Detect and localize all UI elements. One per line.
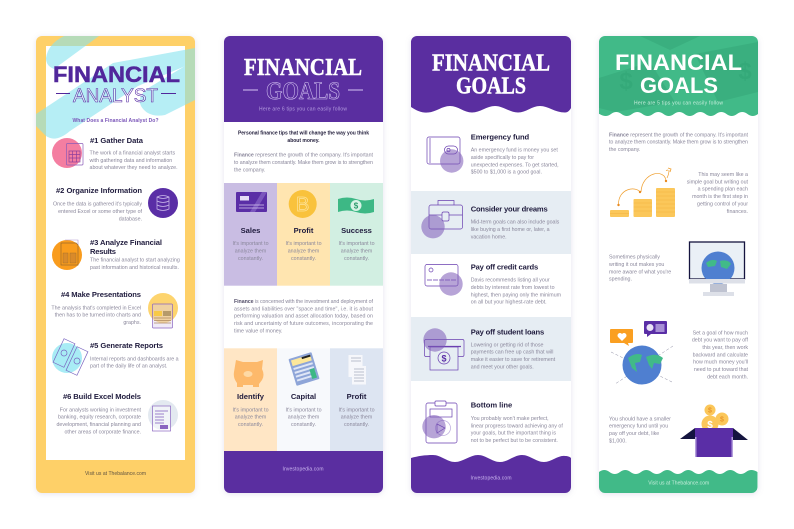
row: emergency fund: [427, 132, 559, 176]
row: emergency fund: $500 to $1,000 is a good goal.: [471, 170, 542, 176]
item 5: generate reports: Internal reports and dashboards are a: [90, 356, 179, 362]
card: sales: analyze them: [235, 249, 267, 255]
item 5: generate reports: part of the daily life of an analyst.: [90, 364, 167, 370]
paragraph: risk and uncertainty of future outcomes, incorporating the: [234, 321, 373, 327]
header: FINANCIAL: [615, 50, 742, 75]
intro text: about money.: [287, 138, 320, 144]
text block: month is the first step in: [692, 194, 748, 200]
row: bottom line: your goals, but the important thing is: [471, 431, 556, 437]
paragraph: [234, 299, 374, 335]
header: $: [738, 58, 752, 85]
item 5: generate reports: #5 Generate Reports: [90, 341, 163, 350]
item 5: generate reports: [52, 339, 179, 375]
icon: box with coins: $: [708, 408, 712, 414]
header: GOALS: [640, 73, 718, 98]
title: FINANCIAL: [53, 62, 180, 87]
item 3: analyze results: [52, 238, 180, 271]
card: success bill: analyze them: [341, 249, 373, 255]
item 2: organize information: database.: [119, 216, 142, 222]
row: pay off credit cards: debts by interest rate from lowest to: [471, 285, 555, 291]
footer: [599, 470, 758, 493]
row: pay off credit cards: on all but your highest-rate debt.: [471, 300, 547, 306]
row: pay off credit cards: Davis recommends listing all your: [471, 278, 550, 284]
paragraph: time value of money.: [234, 329, 282, 335]
row: pay off student loans: and meet your other goals.: [471, 364, 534, 370]
row: pay off credit cards: [425, 263, 562, 306]
row: pay off student loans: $: [441, 354, 447, 364]
item 2: organize information: Once the data is gathered it's typically: [53, 202, 142, 208]
text block: backward and calculate: [693, 352, 748, 358]
row: emergency fund: Emergency fund: [471, 132, 530, 141]
intro text: the company.: [609, 147, 640, 153]
card: profit coin: B: [296, 194, 309, 216]
text block: $1,000.: [609, 438, 627, 444]
item 4: make presentations: #4 Make Presentations: [61, 290, 141, 299]
row: consider your dreams: like buying a first home or, later, a: [471, 227, 550, 233]
text block: writing it out makes you: [609, 262, 664, 268]
row: consider your dreams: vacation home.: [471, 234, 507, 240]
header: Here are 5 tips you can easily follow: [634, 101, 723, 107]
card: profit documents: Profit: [347, 392, 367, 401]
card: sales: It's important to: [232, 241, 269, 247]
subtitle: What Does a Financial Analyst Do?: [72, 118, 158, 124]
panel: financial analyst: [36, 36, 195, 493]
intro text: [234, 131, 374, 174]
item 6: build excel models: development, financial planning and: [56, 422, 141, 428]
icon: globe with chat bubbles: [610, 321, 673, 384]
row: bottom line: linear progress toward achieving any of: [471, 423, 563, 429]
item 6: build excel models: #6 Build Excel Models: [63, 392, 141, 401]
item 1: gather data: The work of a financial analyst starts: [90, 150, 176, 156]
card: identify: It's important to: [232, 407, 269, 413]
card: profit documents: analyze them: [341, 415, 373, 421]
text block: This may seem like a: [698, 172, 748, 178]
intro text: the company.: [234, 168, 265, 174]
item 1: gather data: with gathering data and information: [90, 158, 172, 164]
header: FINANCIAL: [432, 51, 550, 77]
title: ANALYST: [73, 85, 158, 107]
icon: monitor: [689, 242, 745, 296]
item 6: build excel models: [56, 392, 178, 435]
text block: Sometimes physically: [609, 255, 660, 261]
intro text: Finance represent the growth of the company. It's important: [609, 132, 749, 138]
card: success bill: constantly.: [344, 256, 369, 262]
text block: need to put toward that: [694, 367, 749, 373]
text block: finances.: [727, 209, 748, 215]
item 6: build excel models: other areas of corporate finance.: [64, 429, 141, 435]
item 3: analyze results: Results: [90, 247, 116, 256]
row: pay off credit cards: Pay off credit cards: [471, 263, 538, 272]
text block: debt each month.: [707, 374, 748, 380]
header: Here are 6 tips you can easily follow: [259, 107, 347, 113]
item 6: build excel models: For analysts working in investment: [60, 408, 142, 414]
text block: getting control of your: [697, 202, 748, 208]
row: bottom line: You probably won't make perfect,: [471, 416, 549, 422]
card: profit coin: It's important to: [285, 241, 322, 247]
paragraph: performing valuation and asset allocation today, based on: [234, 314, 373, 320]
card: profit coin: constantly.: [291, 256, 316, 262]
item 3: analyze results: The financial analyst to start analyzing: [90, 258, 180, 264]
intro text: Personal finance tips that will change the way you think: [238, 131, 369, 137]
intro text: Finance represent the growth of the company. It's important: [234, 153, 374, 159]
icon: box with coins: $: [720, 416, 724, 424]
row: pay off student loans: make it easier to save for retirement: [471, 357, 556, 363]
row: pay off student loans: Pay off student loans: [471, 327, 544, 336]
header: GOALS: [266, 78, 340, 105]
intro text: [609, 132, 749, 153]
panel: financial goals list: [411, 36, 571, 493]
card: success bill: [330, 183, 383, 286]
text block: [609, 255, 671, 283]
card: success bill: $: [354, 202, 359, 210]
card: identify: analyze them: [235, 415, 267, 421]
header: [224, 36, 383, 122]
header: [411, 36, 571, 113]
header: GOALS: [456, 73, 526, 99]
row: emergency fund: An emergency fund is money you set: [471, 148, 558, 154]
footer: Visit us at Thebalance.com: [85, 471, 146, 477]
card: sales: constantly.: [238, 256, 263, 262]
text block: pay off your debt, like: [609, 431, 659, 437]
paragraph: Finance is concerned with the investment and deployment of: [234, 299, 374, 305]
card: capital calculator: Capital: [291, 392, 316, 401]
text block: [692, 330, 749, 380]
header: FINANCIAL: [244, 55, 362, 81]
row: bottom line: not to be perfect but to be consistent.: [471, 438, 558, 444]
card: sales: Sales: [241, 226, 260, 235]
card: identify: constantly.: [238, 422, 263, 428]
icon: coin stacks: [610, 168, 675, 217]
card: profit documents: It's important to: [338, 407, 375, 413]
text block: how much money you'll: [693, 360, 748, 366]
intro text: to analyze them constantly. Make them grow is to strengthen: [609, 140, 748, 146]
item 4: make presentations: The analysis that's completed in Excel: [51, 306, 141, 312]
card: sales: [224, 183, 277, 286]
row: pay off student loans: payments can free up cash that will: [471, 350, 553, 356]
item 2: organize information: [53, 186, 178, 222]
row: pay off credit cards: highest, then paying only the minimum: [471, 292, 562, 298]
header: $: [619, 68, 633, 95]
card: capital calculator: constantly.: [291, 422, 316, 428]
paragraph: assets and liabilities over "space and time", i.e. it is about: [234, 306, 374, 312]
card: identify: [224, 348, 277, 451]
item 1: gather data: #1 Gather Data: [90, 136, 144, 145]
item 3: analyze results: #3 Analyze Financial: [90, 238, 162, 247]
item 2: organize information: entered Excel or some other type of: [58, 209, 143, 215]
card: profit coin: Profit: [294, 226, 314, 235]
icon: box with coins: $: [707, 420, 713, 431]
card: capital calculator: [277, 348, 330, 451]
row: consider your dreams: Mid-term goals can also include goals: [471, 220, 560, 226]
row: consider your dreams: Consider your dreams: [471, 205, 548, 214]
text block: You should have a smaller: [609, 416, 671, 422]
text block: a spending plan each: [698, 187, 748, 193]
row: pay off student loans: Lowering or getting rid of those: [471, 342, 543, 348]
item 3: analyze results: past information and historical results.: [90, 265, 179, 271]
card: capital calculator: It's important to: [285, 407, 322, 413]
row: consider your dreams: [411, 191, 571, 254]
item 4: make presentations: [51, 290, 178, 328]
title: [53, 62, 180, 107]
card: capital calculator: analyze them: [288, 415, 320, 421]
footer: [224, 451, 383, 493]
footer: [411, 455, 571, 493]
intro text: to analyze them constantly. Make them grow is to strengthen: [234, 160, 373, 166]
text block: more aware of what you're: [609, 269, 671, 275]
item 4: make presentations: then has to be turned into charts and: [55, 313, 141, 319]
row: emergency fund: unexpected expenses. To get started,: [471, 162, 559, 168]
footer: Investopedia.com: [282, 467, 324, 473]
row: emergency fund: aside specifically to pay for: [471, 155, 534, 161]
item 4: make presentations: graphs.: [123, 320, 141, 326]
text block: debt you want to pay off: [692, 338, 749, 344]
card: identify: Identify: [237, 392, 265, 401]
text block: spending.: [609, 277, 632, 283]
footer: Visit us at Thebalance.com: [648, 481, 709, 487]
row: bottom line: [422, 401, 563, 444]
item 1: gather data: [52, 136, 178, 171]
text block: this year, then work: [702, 345, 748, 351]
text block: simple goal but writing out: [687, 179, 749, 185]
text block: Set a goal of how much: [693, 330, 748, 336]
item 2: organize information: #2 Organize Information: [56, 186, 142, 195]
card: profit coin: [277, 183, 330, 286]
text block: [687, 172, 749, 215]
panel: financial goals green: [599, 36, 758, 493]
card: success bill: Success: [341, 226, 372, 235]
card: success bill: It's important to: [338, 241, 375, 247]
row: bottom line: Bottom line: [471, 401, 512, 410]
header: [599, 36, 758, 116]
row: pay off student loans: [411, 317, 571, 381]
card: profit coin: analyze them: [288, 249, 320, 255]
item 1: gather data: about whatever they need to analyze.: [90, 165, 178, 171]
text block: [609, 416, 671, 444]
text block: emergency fund until you: [609, 424, 668, 430]
item 6: build excel models: banking, equity research, corporate: [58, 415, 141, 421]
panel: financial goals tips: [224, 36, 383, 493]
card: profit documents: constantly.: [344, 422, 369, 428]
card: profit documents: [330, 348, 383, 451]
footer: Investopedia.com: [470, 475, 512, 481]
icon: box with coins: [680, 404, 748, 457]
